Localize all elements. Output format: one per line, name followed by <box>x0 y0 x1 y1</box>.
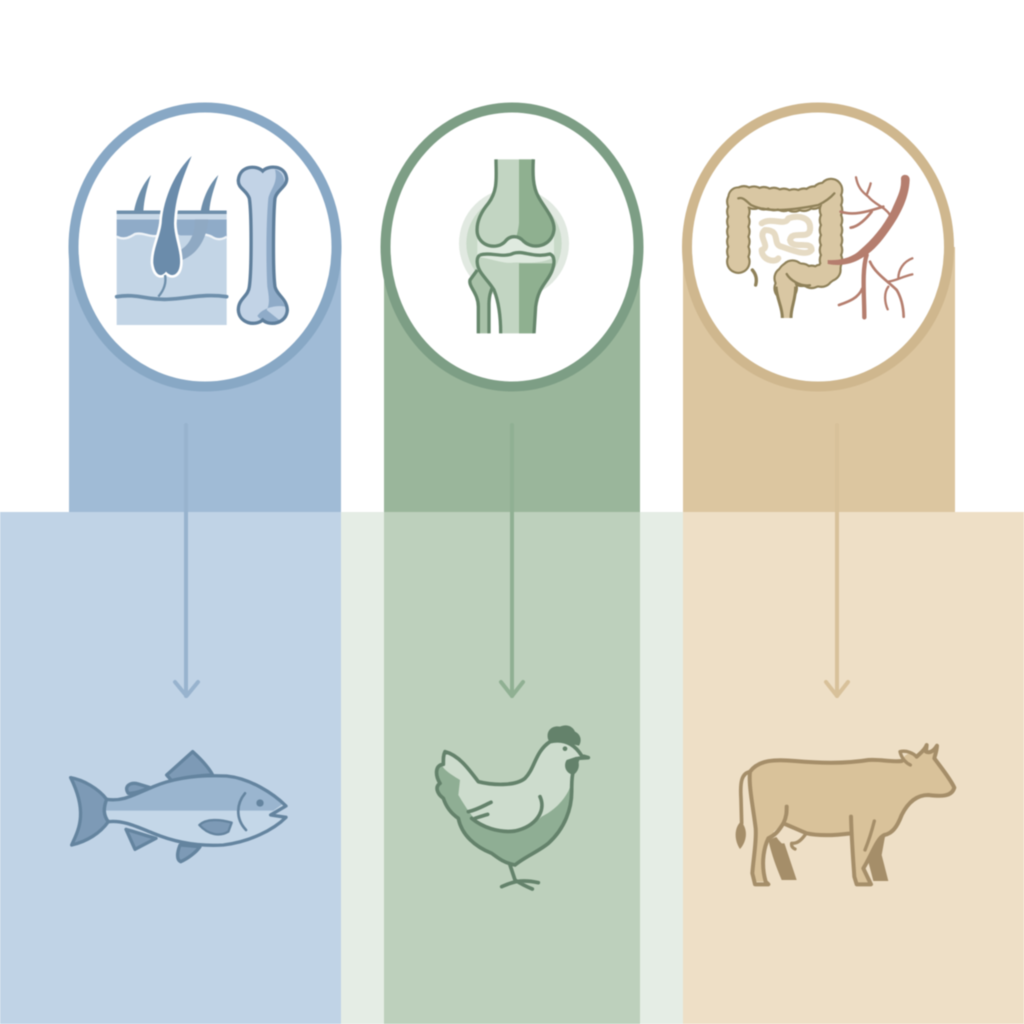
circle: tan badge <box>687 108 949 386</box>
arrow: blue <box>175 425 198 696</box>
panel: lower pale green band <box>341 512 683 1024</box>
icon: knee joint <box>459 159 569 333</box>
circle: blue badge <box>74 108 336 386</box>
panel: lower tan band <box>683 512 1024 1024</box>
panel: upper green column <box>384 250 640 512</box>
panel: lower blue band <box>0 512 341 1024</box>
circle: green badge <box>386 108 638 386</box>
icon: large intestine <box>738 189 834 318</box>
arrow: green <box>501 425 523 696</box>
panel: lower green column <box>384 512 640 1024</box>
icon: blood vessels <box>828 175 912 317</box>
icon: skin cross-section with hair follicle <box>117 156 227 325</box>
icon: bone <box>238 167 287 323</box>
panel: upper blue column <box>69 247 341 512</box>
icon: chicken <box>437 725 588 889</box>
icon: fish <box>71 752 286 862</box>
icon: cow <box>736 745 954 884</box>
arrow: tan <box>826 425 848 696</box>
panel: upper tan column <box>683 247 955 512</box>
